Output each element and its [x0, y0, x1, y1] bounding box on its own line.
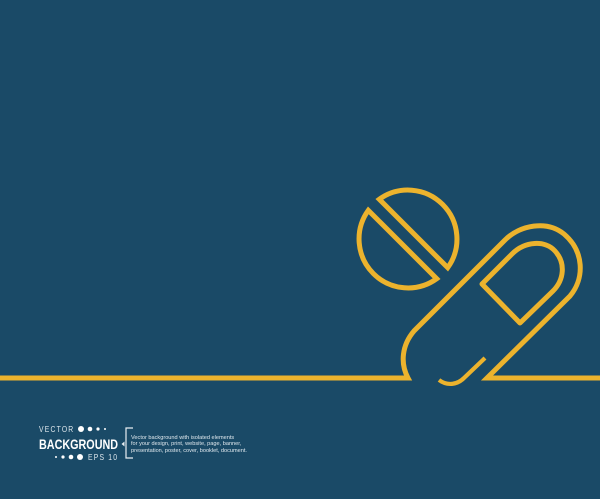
- icon: capsule inner highlight: [482, 243, 562, 323]
- tablet upper half: [379, 190, 457, 268]
- text: description: Vector background with isolated elements: [131, 434, 234, 440]
- text: EPS 10: EPS 10: [88, 452, 118, 462]
- footer: vector background badge: [39, 424, 247, 462]
- text: VECTOR: VECTOR: [39, 424, 74, 434]
- icon: decreasing dots top: [78, 426, 106, 432]
- icon: increasing dots bottom: [55, 454, 83, 460]
- text: description: for your design, print, website, page, banner,: [131, 441, 241, 447]
- text: BACKGROUND: BACKGROUND: [39, 436, 118, 452]
- text: description: presentation, poster, cover, booklet, document.: [131, 448, 247, 454]
- icon: round tablet: [359, 190, 457, 288]
- icon: capsule lower hook: [439, 358, 485, 384]
- icon: bracket: [122, 427, 133, 459]
- tablet lower half: [359, 210, 437, 288]
- text: description: [131, 434, 247, 454]
- icon: capsule outline merging into baseline: [0, 226, 600, 378]
